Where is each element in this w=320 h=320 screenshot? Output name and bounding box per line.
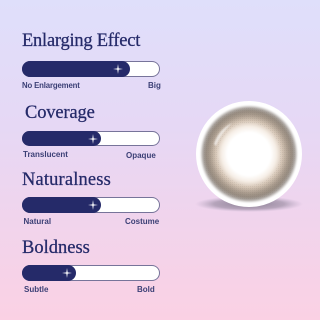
lens iris — [200, 105, 298, 203]
slider: Naturalness — [22, 197, 160, 213]
heading: Naturalness: Naturalness — [22, 170, 111, 190]
icon: contact lens with shadow — [196, 101, 302, 212]
label: Bold: Bold — [137, 285, 155, 294]
shadow — [195, 196, 303, 212]
label: Big: Big — [148, 81, 161, 90]
slider: Enlarging Effect — [22, 61, 160, 77]
heading: Enlarging Effect: Enlarging Effect — [22, 31, 140, 51]
slider: Boldness — [22, 265, 160, 281]
heading: Boldness: Boldness — [22, 238, 90, 258]
lens mesh texture — [203, 108, 295, 200]
label: No Enlargement: No Enlargement — [22, 81, 80, 90]
label: Natural: Natural — [24, 217, 51, 226]
highlight — [214, 123, 232, 146]
slider: Coverage — [22, 131, 160, 146]
label: Subtle: Subtle — [24, 285, 48, 294]
label: Opaque: Opaque — [126, 150, 156, 160]
label: Translucent: Translucent — [23, 150, 68, 159]
lens rim — [196, 101, 302, 207]
heading: Coverage: Coverage — [25, 103, 95, 123]
label: Costume: Costume — [125, 217, 159, 226]
